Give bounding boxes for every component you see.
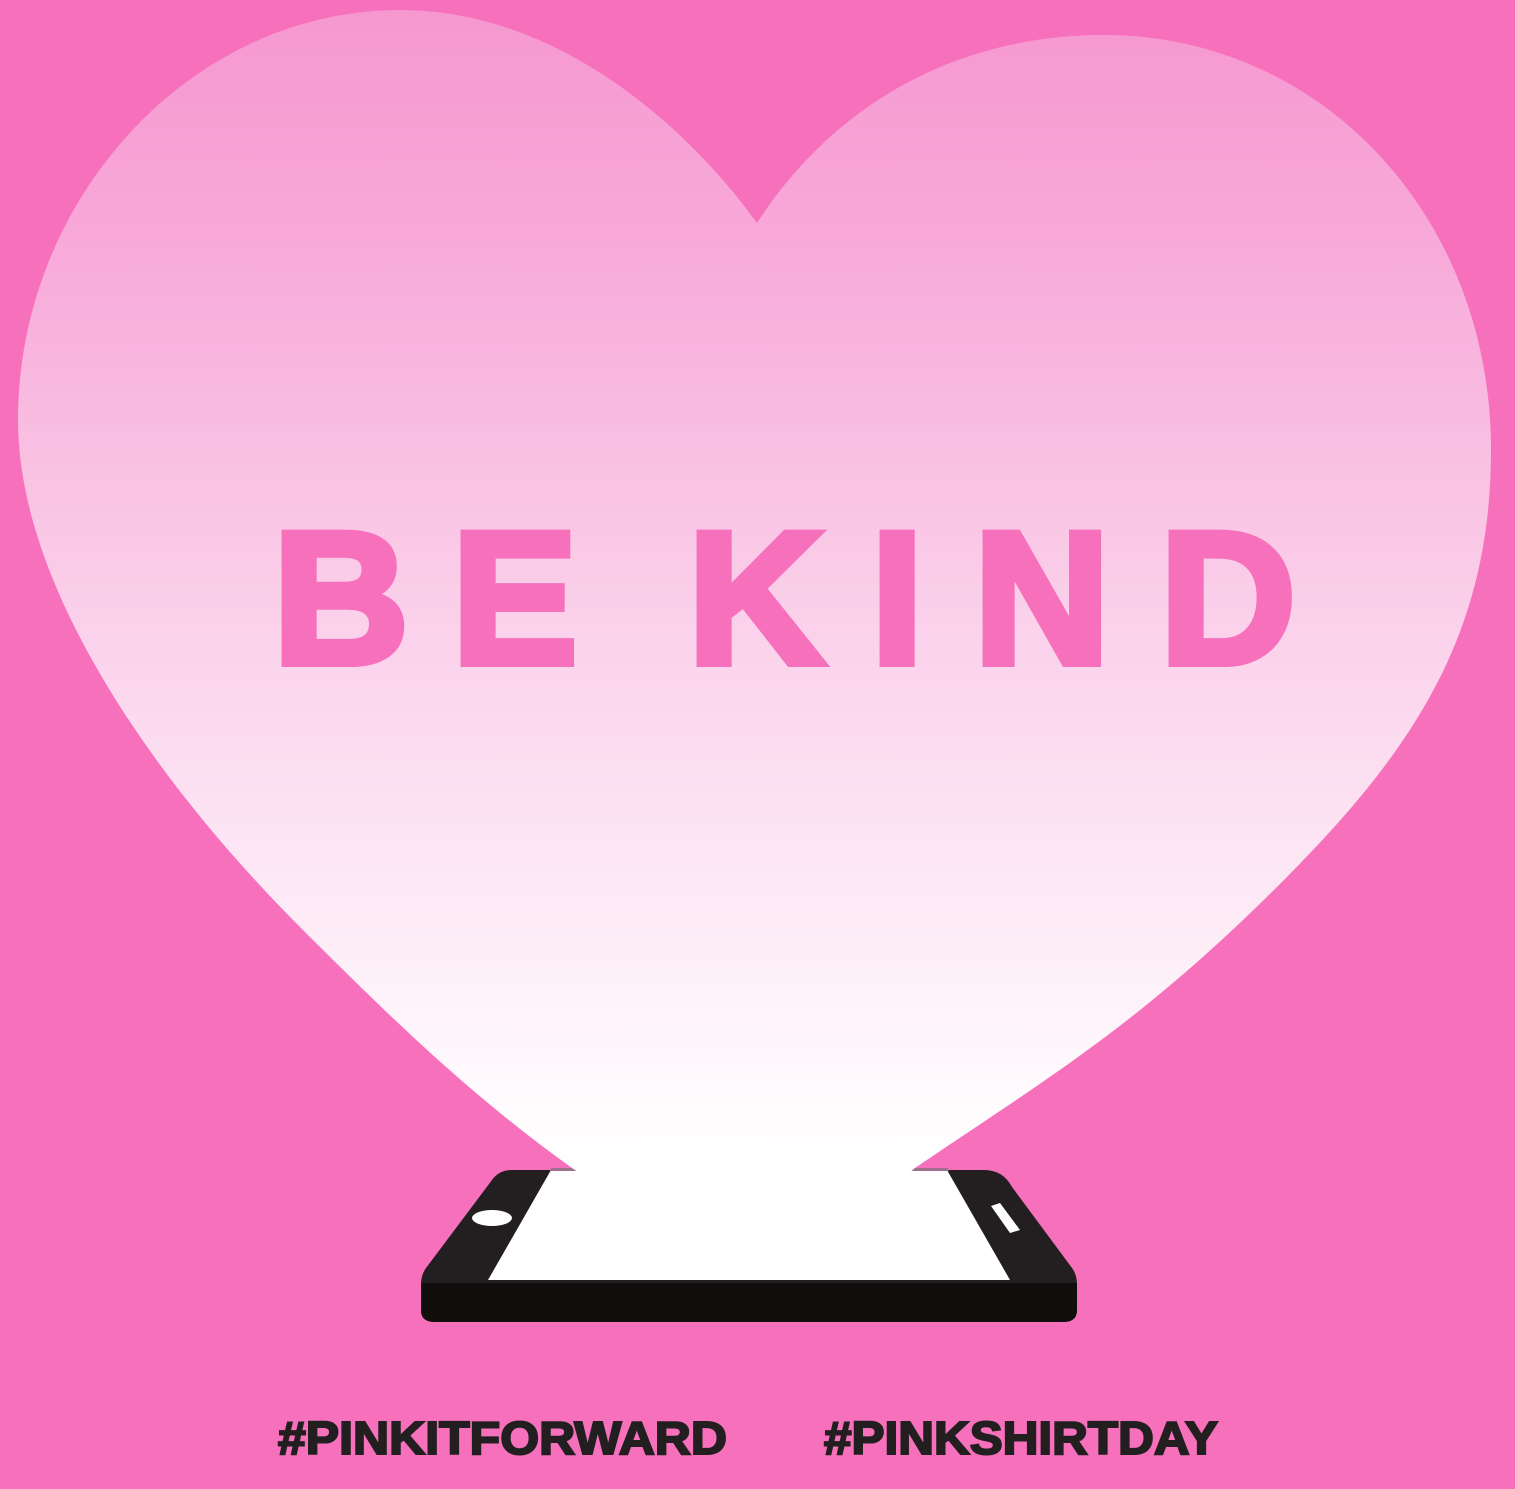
speaker slot bbox=[991, 1203, 1020, 1233]
phone front edge bbox=[421, 1283, 1077, 1322]
heading: BE KIND: BE KIND bbox=[273, 493, 1296, 703]
home button bbox=[472, 1210, 512, 1226]
hashtag: pink it forward: #PINKITFORWARD bbox=[278, 1412, 727, 1464]
phone illustration bbox=[421, 1170, 1077, 1322]
heart of light bbox=[18, 10, 1491, 1172]
phone body bbox=[421, 1170, 1077, 1322]
phone screen bbox=[488, 1170, 1010, 1280]
heart tip shadow right bbox=[910, 1168, 949, 1171]
heart tip shadow left bbox=[550, 1168, 578, 1171]
hashtag: pink shirt day: #PINKSHIRTDAY bbox=[824, 1412, 1218, 1464]
